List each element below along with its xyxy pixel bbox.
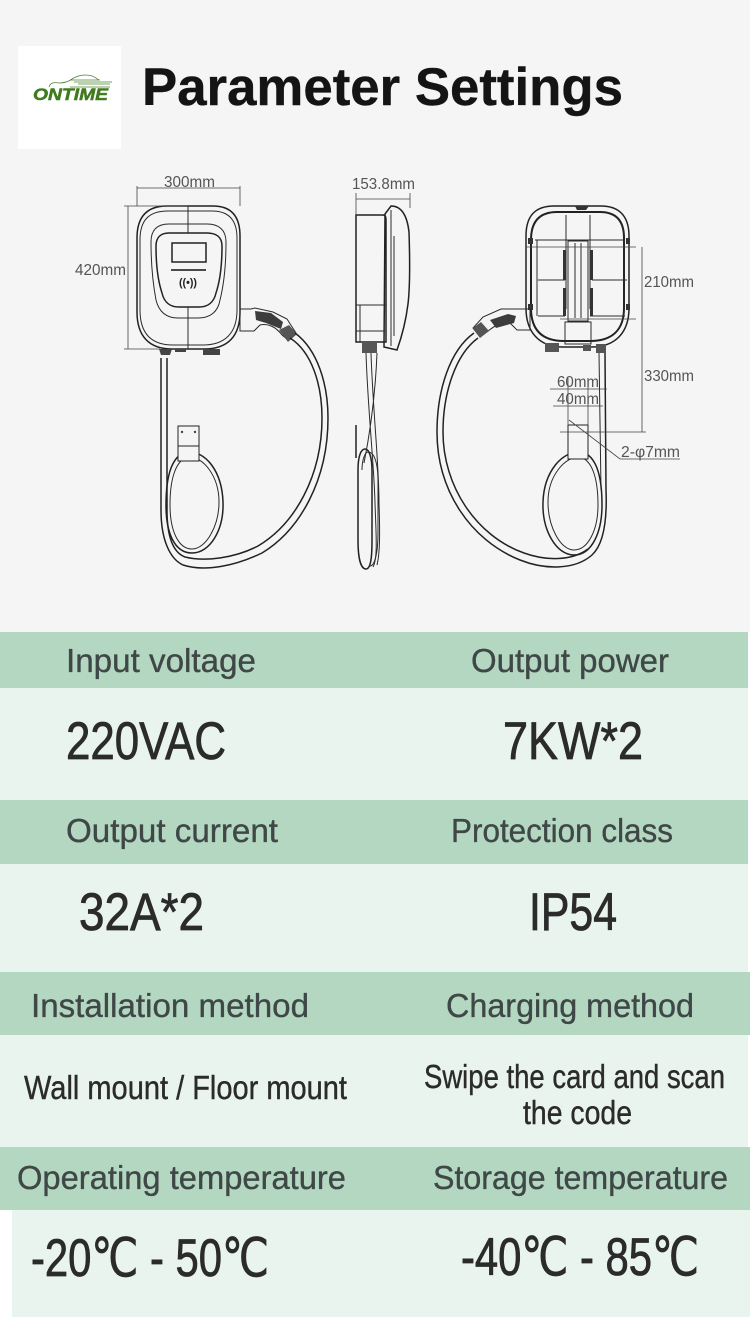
- label: protection class: Protection class: [451, 812, 673, 849]
- label: operating temperature: Operating temperature: [17, 1159, 346, 1196]
- dimension: 300mm: 300mm: [164, 174, 215, 191]
- value: swipe card and scan code: the code: [523, 1094, 632, 1131]
- value: swipe card and scan code: [424, 1058, 725, 1131]
- front view drawing: [75, 174, 328, 568]
- title: Parameter Settings: [142, 58, 623, 117]
- dimension: hole diameter: 2-φ7mm: [621, 444, 680, 461]
- icon: contactless: ((•)): [179, 277, 197, 289]
- panel: installation and charging method: [0, 972, 750, 1147]
- side view: cable and holder: [356, 353, 380, 569]
- dimension: 40mm: 40mm: [557, 391, 599, 408]
- label: output power: Output power: [471, 642, 669, 679]
- panel: input and output power: [0, 632, 748, 800]
- dimension: 330mm: 330mm: [644, 368, 694, 385]
- side view drawing: [352, 176, 415, 569]
- dimension lines: [356, 193, 410, 215]
- front view: cable: [161, 333, 328, 568]
- front view: charging gun: [240, 308, 297, 342]
- value: 220VAC: 220VAC: [66, 712, 226, 771]
- logo: Ontime: [18, 46, 121, 149]
- logo: Ontime: ONTIME: [33, 85, 109, 104]
- dimension: 60mm: 60mm: [557, 374, 599, 391]
- panel: temperature ranges: [0, 1147, 750, 1317]
- dimension: 420mm: 420mm: [75, 262, 126, 279]
- label: input voltage: Input voltage: [66, 642, 256, 679]
- rear view: cable: [437, 333, 606, 567]
- label: output current: Output current: [66, 812, 278, 849]
- value: 7KW*2: 7KW*2: [503, 712, 643, 771]
- dimension lines: [526, 247, 680, 459]
- dimension: 153.8mm: 153.8mm: [352, 176, 415, 193]
- dimension: 210mm: 210mm: [644, 274, 694, 291]
- dimension lines: [124, 186, 240, 349]
- rear view: charging gun: [473, 309, 530, 338]
- label: storage temperature: Storage temperature: [433, 1159, 728, 1196]
- rear view drawing: [437, 206, 694, 567]
- label: installation method: Installation method: [31, 987, 309, 1024]
- label: charging method: Charging method: [446, 987, 694, 1024]
- value: wall mount or floor mount: Wall mount / Floor mount: [24, 1069, 347, 1106]
- side view: charger body: [356, 206, 410, 353]
- value: operating range: -20℃ - 50℃: [31, 1229, 269, 1288]
- value: 32A*2: 32A*2: [79, 883, 204, 942]
- value: IP54: IP54: [529, 883, 617, 942]
- panel: current and protection: [0, 800, 748, 972]
- front view: charger body: [137, 206, 240, 355]
- rear view: charger body: [526, 206, 630, 353]
